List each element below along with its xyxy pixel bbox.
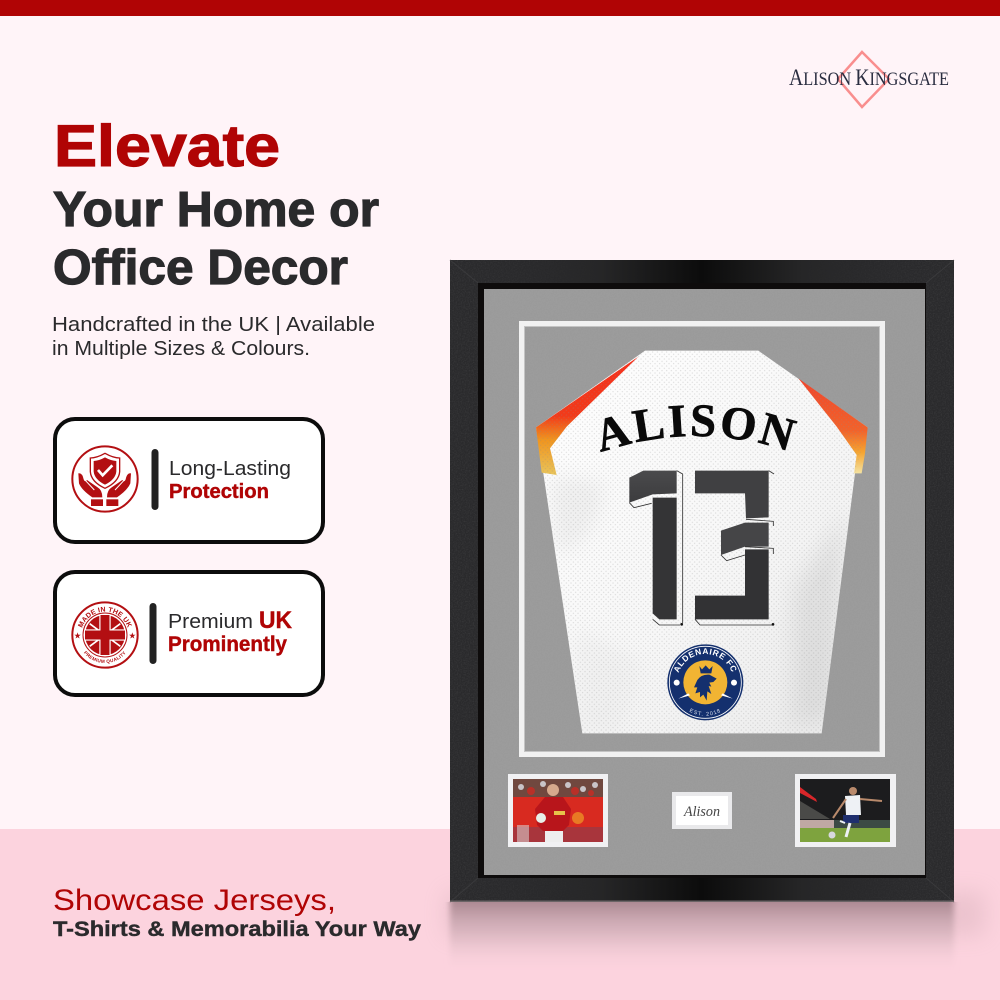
headline: Your Home or (53, 183, 379, 237)
footer tagline: Showcase Jerseys, (53, 884, 336, 917)
club crest: ALDENAIRE FC (674, 648, 736, 673)
icon: made in the uk seal (71, 601, 139, 669)
badge text: Long-Lasting (169, 458, 291, 480)
footer tagline: T-Shirts & Memorabilia Your Way (53, 918, 421, 941)
panel: premium uk (53, 570, 325, 697)
club crest (667, 644, 744, 720)
right player photo (795, 774, 896, 847)
bottom pink band (0, 829, 1000, 1000)
icon: made in the uk seal: ★ (74, 630, 82, 640)
subheading (52, 314, 375, 360)
badge text: Premium (168, 611, 253, 633)
jersey body (536, 351, 868, 733)
signature card (672, 792, 732, 829)
right sleeve trim (798, 378, 868, 473)
badge text: UK (259, 607, 293, 634)
divider bar (152, 449, 158, 510)
outer frame (450, 260, 954, 902)
panel: long-lasting protection (55, 419, 323, 542)
signature card: Alison (683, 804, 720, 820)
crest lion (694, 665, 717, 701)
left player photo (508, 774, 608, 847)
brand logo: ALISON KINGSGATE (789, 65, 949, 90)
headline: Elevate (54, 114, 280, 179)
badge text (168, 607, 293, 656)
brand logo (789, 52, 949, 107)
white inner mount border (522, 324, 882, 754)
subheading: Handcrafted in the UK | Available (52, 314, 375, 336)
subheading: in Multiple Sizes & Colours. (52, 338, 310, 360)
headline: Office Decor (53, 241, 348, 295)
badge text (169, 458, 291, 503)
jersey (536, 350, 868, 734)
framed jersey (444, 260, 984, 954)
icon: made in the uk seal: MADE IN THE UK (78, 606, 132, 628)
club crest: EST. 2018 (690, 708, 720, 716)
player name: ALISON (600, 404, 798, 452)
shirt mesh (536, 351, 868, 733)
divider bar (150, 603, 156, 664)
badge text: Protection (169, 481, 269, 503)
icon: made in the uk seal: PREMIUM QUALITY (84, 650, 126, 664)
frame reflection (445, 892, 985, 974)
headline (53, 114, 379, 295)
left sleeve trim (536, 357, 638, 475)
top red bar (0, 0, 1000, 16)
icon: made in the uk seal: ★ (128, 630, 136, 640)
icon: shield in hands (72, 446, 138, 512)
grey mat (484, 289, 925, 875)
badge text: Prominently (168, 633, 287, 656)
footer tagline (53, 884, 421, 941)
shirt number 13 (629, 471, 774, 626)
